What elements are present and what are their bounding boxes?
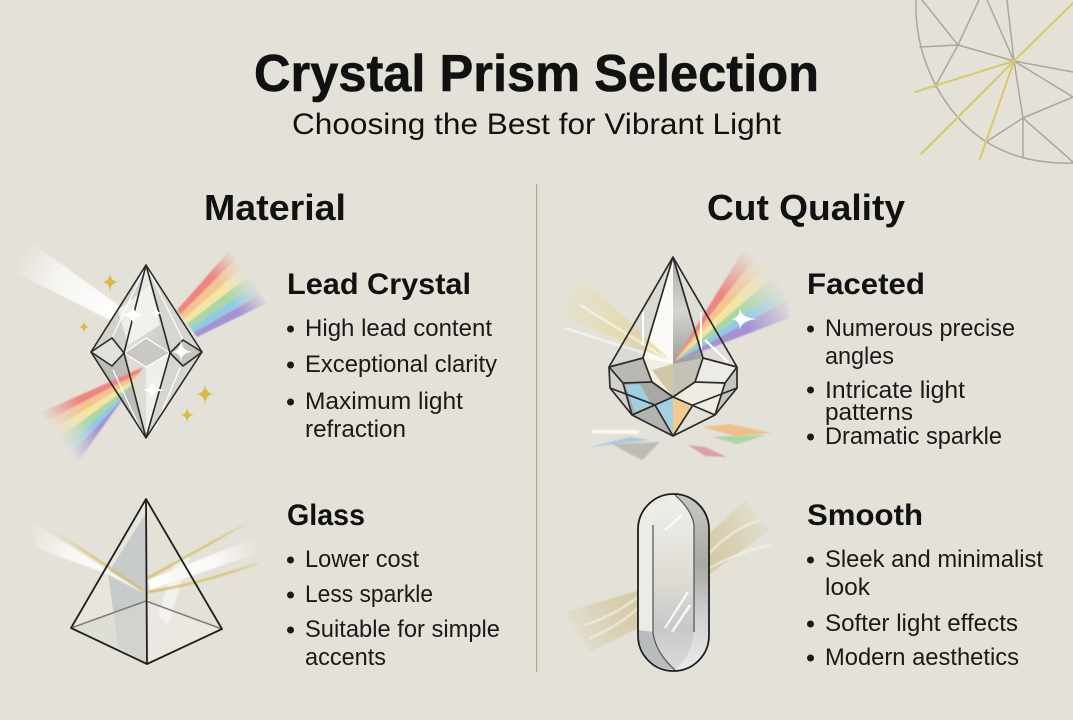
heading: Smooth: Smooth xyxy=(807,499,923,532)
bullet list: lead crystal xyxy=(287,315,497,443)
bullet list: glass: accents xyxy=(305,644,386,671)
bullet list: glass: Lower cost xyxy=(305,546,419,573)
panel: smooth capsule xyxy=(565,494,770,671)
panel: glass pyramid xyxy=(32,499,258,664)
icon: pyramid outline xyxy=(71,499,222,664)
panel: faceted crystal xyxy=(560,248,789,460)
icon: incoming beam xyxy=(32,522,146,594)
bullet list: faceted xyxy=(807,315,1015,450)
icon: white sparkles xyxy=(118,305,194,400)
bullet list: smooth xyxy=(807,546,1043,671)
bullet list: smooth: Modern aesthetics xyxy=(825,644,1019,671)
bullet list: lead crystal: Exceptional clarity xyxy=(305,351,497,378)
text block: smooth xyxy=(807,499,1043,671)
icon: inner face xyxy=(653,495,694,670)
panel: lead crystal xyxy=(14,243,267,463)
bullet list: smooth: Sleek and minimalist xyxy=(825,546,1043,573)
text block: lead crystal xyxy=(287,268,497,443)
icon: white facet highlights xyxy=(643,312,728,362)
bullet list: faceted: Dramatic sparkle xyxy=(825,423,1002,450)
bullet list: lead crystal: High lead content xyxy=(305,315,492,342)
bullet list: lead crystal: refraction xyxy=(305,416,406,443)
bullet list: faceted: Intricate light xyxy=(825,377,965,404)
icon: pyramid back edges xyxy=(71,601,222,629)
bullet list: glass: Less sparkle xyxy=(305,581,433,608)
icon: lower rainbow xyxy=(40,367,143,463)
icon: upper rainbow xyxy=(177,250,267,337)
subtitle: Choosing the Best for Vibrant Light xyxy=(292,108,782,141)
icon: inner face edges xyxy=(653,495,694,670)
icon: white incoming beam xyxy=(14,243,125,320)
column heading: Cut Quality: Cut Quality xyxy=(707,187,905,228)
bullet list: smooth: look xyxy=(825,574,871,601)
icon: rainbow beam xyxy=(674,248,789,362)
icon: crystal outline xyxy=(91,265,202,438)
heading: Faceted: Faceted xyxy=(807,268,925,301)
icon: gold sparkles xyxy=(78,272,215,424)
bullet list: lead crystal: Maximum light xyxy=(305,388,463,415)
bullet list: glass xyxy=(287,546,500,671)
icon: crystal outline xyxy=(609,257,737,436)
icon: right bevel xyxy=(675,495,709,670)
bullet list: glass: Suitable for simple xyxy=(305,616,500,643)
icon: white sparkle xyxy=(730,307,760,331)
text block: glass xyxy=(287,499,500,671)
icon: capsule outline xyxy=(638,494,709,671)
icon: inner highlights xyxy=(665,515,690,632)
icon: tan beams right xyxy=(708,500,770,575)
icon: tan beams left xyxy=(565,590,640,652)
corner ornament: faceted diamond linework xyxy=(915,0,1073,163)
icon: outgoing beams xyxy=(57,523,258,625)
icon: crystal facets xyxy=(609,257,737,436)
heading: Lead Crystal: Lead Crystal xyxy=(287,268,471,301)
bullet list: smooth: Softer light effects xyxy=(825,610,1018,637)
text block: faceted xyxy=(807,268,1015,450)
title: Crystal Prism Selection xyxy=(254,45,819,103)
icon: yellow incoming beam xyxy=(560,270,672,362)
bullet list: faceted: Numerous precise xyxy=(825,315,1015,342)
icon: pyramid facets xyxy=(71,499,222,664)
icon: light shards below crystal xyxy=(587,424,772,460)
icon: capsule body xyxy=(638,494,709,671)
column heading: Material: Material xyxy=(204,187,346,228)
heading: Glass: Glass xyxy=(287,499,365,532)
bullet list: faceted: angles xyxy=(825,343,894,370)
centre divider xyxy=(536,184,537,672)
icon: inner white highlight lines xyxy=(112,265,183,428)
bullet list: faceted: patterns xyxy=(825,399,913,426)
icon: crystal body facets xyxy=(91,265,202,438)
icon: lower-left bevel xyxy=(639,630,675,670)
